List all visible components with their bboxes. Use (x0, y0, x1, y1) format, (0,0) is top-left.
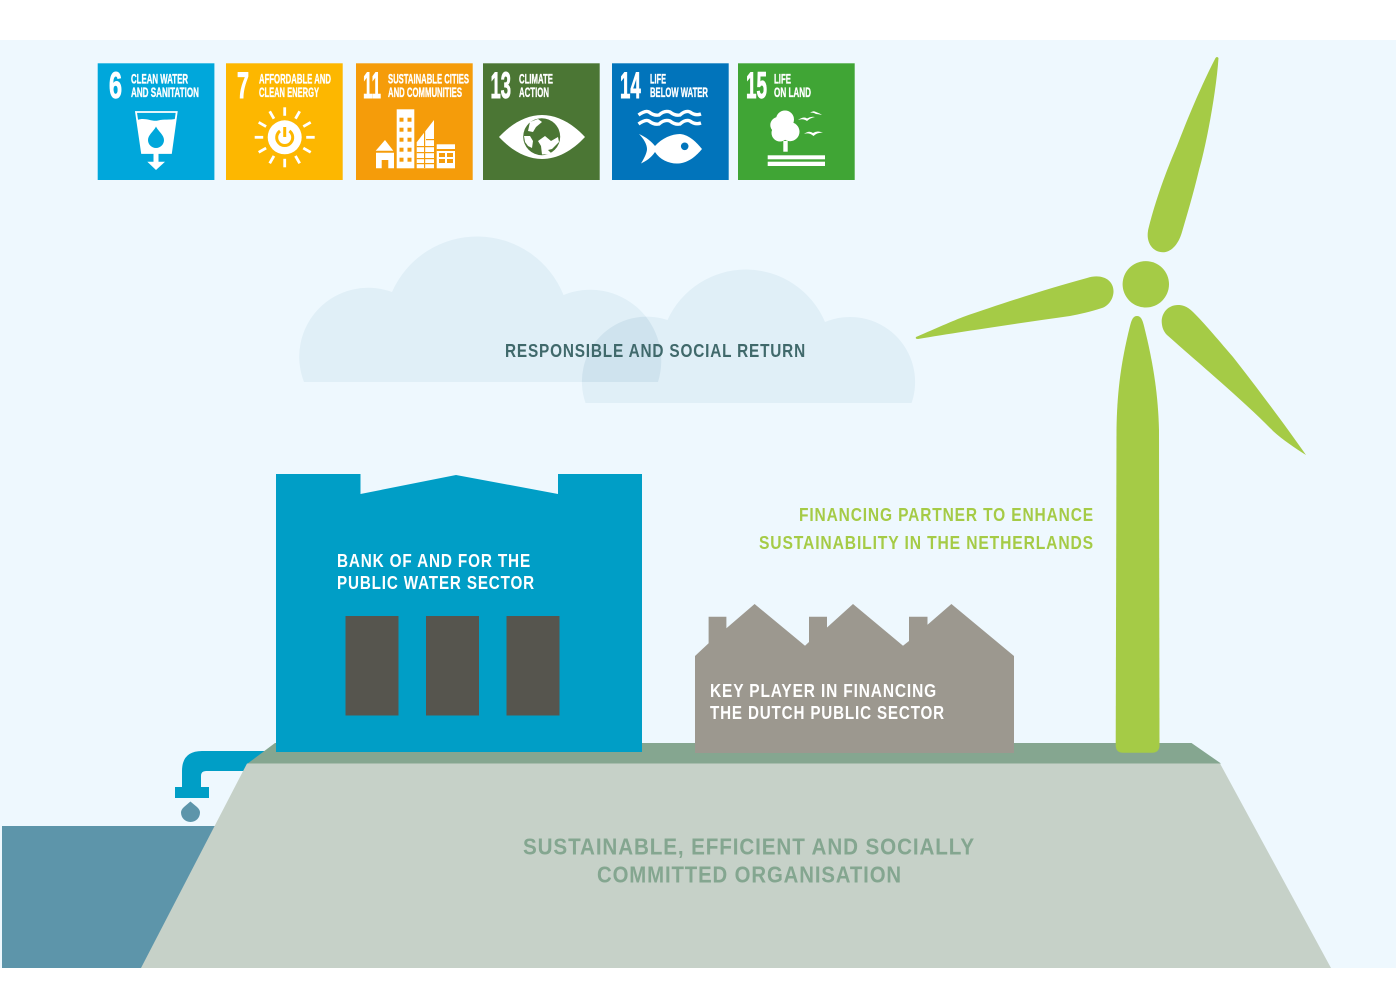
icon: tree and birds (768, 110, 825, 166)
icon: waves and fish (638, 111, 702, 164)
panel: SDG 11 tile: AND COMMUNITIES (388, 85, 462, 100)
panel: SDG 14 tile: 14 (620, 65, 641, 106)
factory text: THE DUTCH PUBLIC SECTOR (710, 703, 945, 723)
panel: SDG 6 tile (98, 63, 214, 180)
financing partner text: FINANCING PARTNER TO ENHANCE (799, 505, 1094, 525)
panel: SDG 13 tile: CLIMATE (519, 71, 553, 86)
panel: SDG 13 tile: 13 (490, 65, 511, 106)
panel: SDG 15 tile: 15 (746, 65, 767, 106)
ground text (523, 834, 975, 888)
icon: wind turbine (916, 57, 1306, 753)
building windows (346, 616, 560, 716)
building text: PUBLIC WATER SECTOR (337, 573, 535, 593)
icon: water drop (181, 802, 200, 822)
platform top (247, 743, 1221, 764)
panel: SDG 11 tile: 11 (363, 65, 381, 106)
panel: SDG 15 tile: ON LAND (774, 85, 811, 100)
building text: BANK OF AND FOR THE (337, 551, 531, 571)
panel: SDG 6 tile: 6 (109, 65, 122, 106)
panel: SDG 7 tile: 7 (237, 65, 249, 106)
panel: SDG 11 tile: SUSTAINABLE CITIES (388, 71, 469, 86)
panel: SDG 13 tile (483, 63, 600, 180)
panel: SDG 6 tile: AND SANITATION (131, 85, 199, 100)
building text (337, 551, 535, 593)
panel: blue bank building (276, 474, 642, 752)
panel: SDG 7 tile: CLEAN ENERGY (259, 85, 319, 100)
panel: SDG 7 tile: AFFORDABLE AND (259, 71, 331, 86)
icon: eye with globe (499, 115, 585, 159)
panel: grey factory (695, 604, 1014, 753)
blade: right (1162, 305, 1306, 455)
financing partner text: SUSTAINABILITY IN THE NETHERLANDS (759, 533, 1094, 553)
icon: water tap (175, 751, 272, 798)
icon: city skyline (376, 109, 455, 168)
panel: SDG 14 tile: LIFE (650, 71, 666, 86)
turbine hub (1123, 261, 1169, 307)
panel: SDG 14 tile (612, 63, 729, 180)
factory text: KEY PLAYER IN FINANCING (710, 681, 937, 701)
panel: SDG 15 tile (738, 63, 855, 180)
ground text: SUSTAINABLE, EFFICIENT AND SOCIALLY (523, 834, 975, 860)
heading: responsible and social return: RESPONSIBLE AND SOCIAL RETURN (505, 340, 806, 361)
panel: SDG 7 tile (226, 63, 343, 180)
factory text (710, 681, 945, 723)
icon: sun with power symbol (255, 107, 315, 167)
icon: glass of water (136, 112, 177, 170)
blade: top (1148, 57, 1218, 252)
ground text: COMMITTED ORGANISATION (597, 862, 902, 888)
financing partner text (759, 505, 1094, 553)
panel: SDG 13 tile: ACTION (519, 85, 549, 100)
panel: SDG 14 tile: BELOW WATER (650, 85, 708, 100)
turbine tower (1116, 316, 1160, 753)
water body (2, 826, 262, 968)
panel: SDG 6 tile: CLEAN WATER (131, 71, 188, 86)
clouds (299, 236, 915, 403)
blade: left (916, 276, 1114, 339)
ground block (141, 764, 1331, 968)
panel: SDG 11 tile (356, 63, 473, 180)
panel: SDG 15 tile: LIFE (774, 71, 791, 86)
